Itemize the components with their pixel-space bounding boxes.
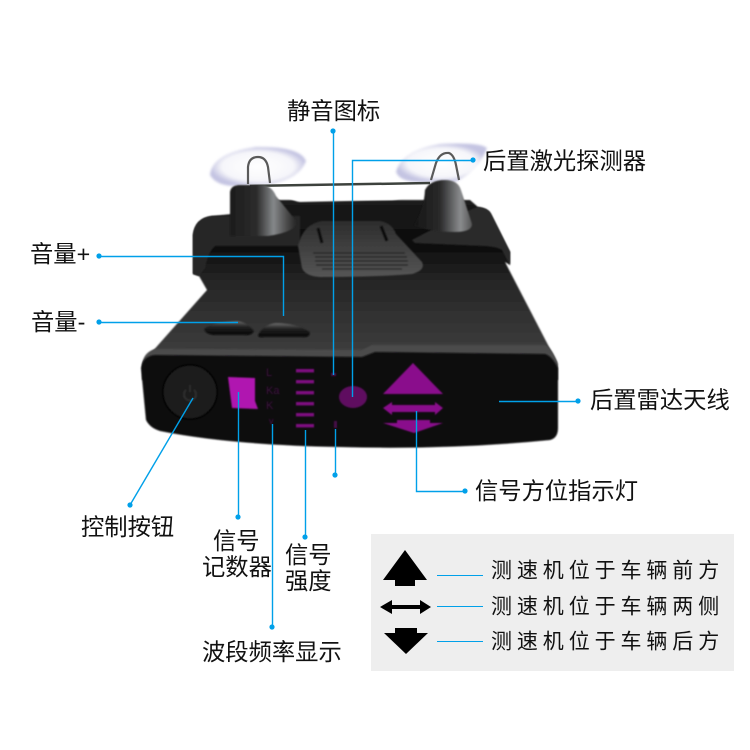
left mount post	[230, 185, 297, 236]
callout: rear radar antenna	[499, 398, 581, 404]
legend line sides	[437, 606, 483, 608]
white gap under wire	[276, 184, 414, 202]
band labels: v	[269, 416, 274, 426]
control button	[163, 365, 217, 419]
signal strength bars	[296, 369, 314, 427]
label: signal counter: 信号	[213, 528, 260, 554]
legend line front	[437, 574, 483, 576]
callout: band frequency display	[269, 424, 275, 630]
bracket right highlight	[412, 207, 510, 265]
label: rear radar antenna: 后置雷达天线	[590, 387, 730, 413]
direction indicator arrows	[383, 363, 443, 433]
label: signal strength: 强度	[285, 568, 332, 594]
label: mute icon: 静音图标	[287, 98, 380, 124]
signal counter display	[228, 377, 258, 409]
icon: double arrow	[380, 600, 431, 614]
legend text front: 测速机位于车辆前方	[491, 560, 724, 582]
label: signal direction indicator: 信号方位指示灯	[475, 478, 638, 504]
radar detector device	[141, 144, 558, 448]
legend text sides: 测速机位于车辆两侧	[491, 596, 724, 618]
label: signal strength: 信号	[285, 542, 332, 568]
legend panel	[371, 534, 734, 671]
callout: rear laser detector	[352, 157, 476, 397]
callout: signal counter	[235, 392, 241, 520]
label: volume down: 音量-	[31, 309, 85, 335]
legend line rear	[437, 640, 483, 642]
label: signal counter: 记数器	[202, 554, 272, 580]
label: band frequency display: 波段频率显示	[202, 639, 342, 665]
front display face	[141, 352, 558, 448]
volume buttons	[204, 321, 310, 337]
icon: down arrow	[384, 628, 428, 654]
label: control button: 控制按钮	[81, 514, 174, 540]
callout: volume down	[96, 319, 238, 325]
center clip	[298, 221, 423, 277]
band labels: K	[266, 400, 274, 412]
callout: signal direction indicator	[416, 411, 468, 494]
band labels	[266, 367, 280, 426]
callout: mute icon	[330, 128, 336, 375]
legend text rear: 测速机位于车辆后方	[491, 630, 724, 654]
right suction cup	[396, 144, 487, 182]
device rear body	[143, 200, 557, 368]
callout: signal strength	[302, 430, 308, 540]
left cup hook	[248, 157, 270, 184]
callout: volume up	[96, 253, 284, 316]
mount wire	[250, 183, 430, 186]
callout: control button	[127, 398, 193, 508]
callout: lower mute marker	[332, 429, 338, 478]
right cup hook	[431, 153, 459, 180]
front bezel	[142, 345, 558, 380]
label: volume up: 音量+	[30, 241, 90, 267]
right mount post	[414, 180, 472, 232]
band labels: Ka	[266, 385, 280, 397]
label: signal strength	[285, 542, 332, 594]
left suction cup	[210, 147, 306, 186]
icon: up arrow	[383, 550, 427, 586]
band labels: L	[266, 367, 272, 379]
bracket highlight	[193, 216, 300, 276]
label: rear laser detector: 后置激光探测器	[483, 148, 646, 174]
rear laser indicator	[339, 386, 367, 408]
mute icon glyphs	[331, 373, 337, 428]
label: signal counter	[202, 528, 272, 580]
